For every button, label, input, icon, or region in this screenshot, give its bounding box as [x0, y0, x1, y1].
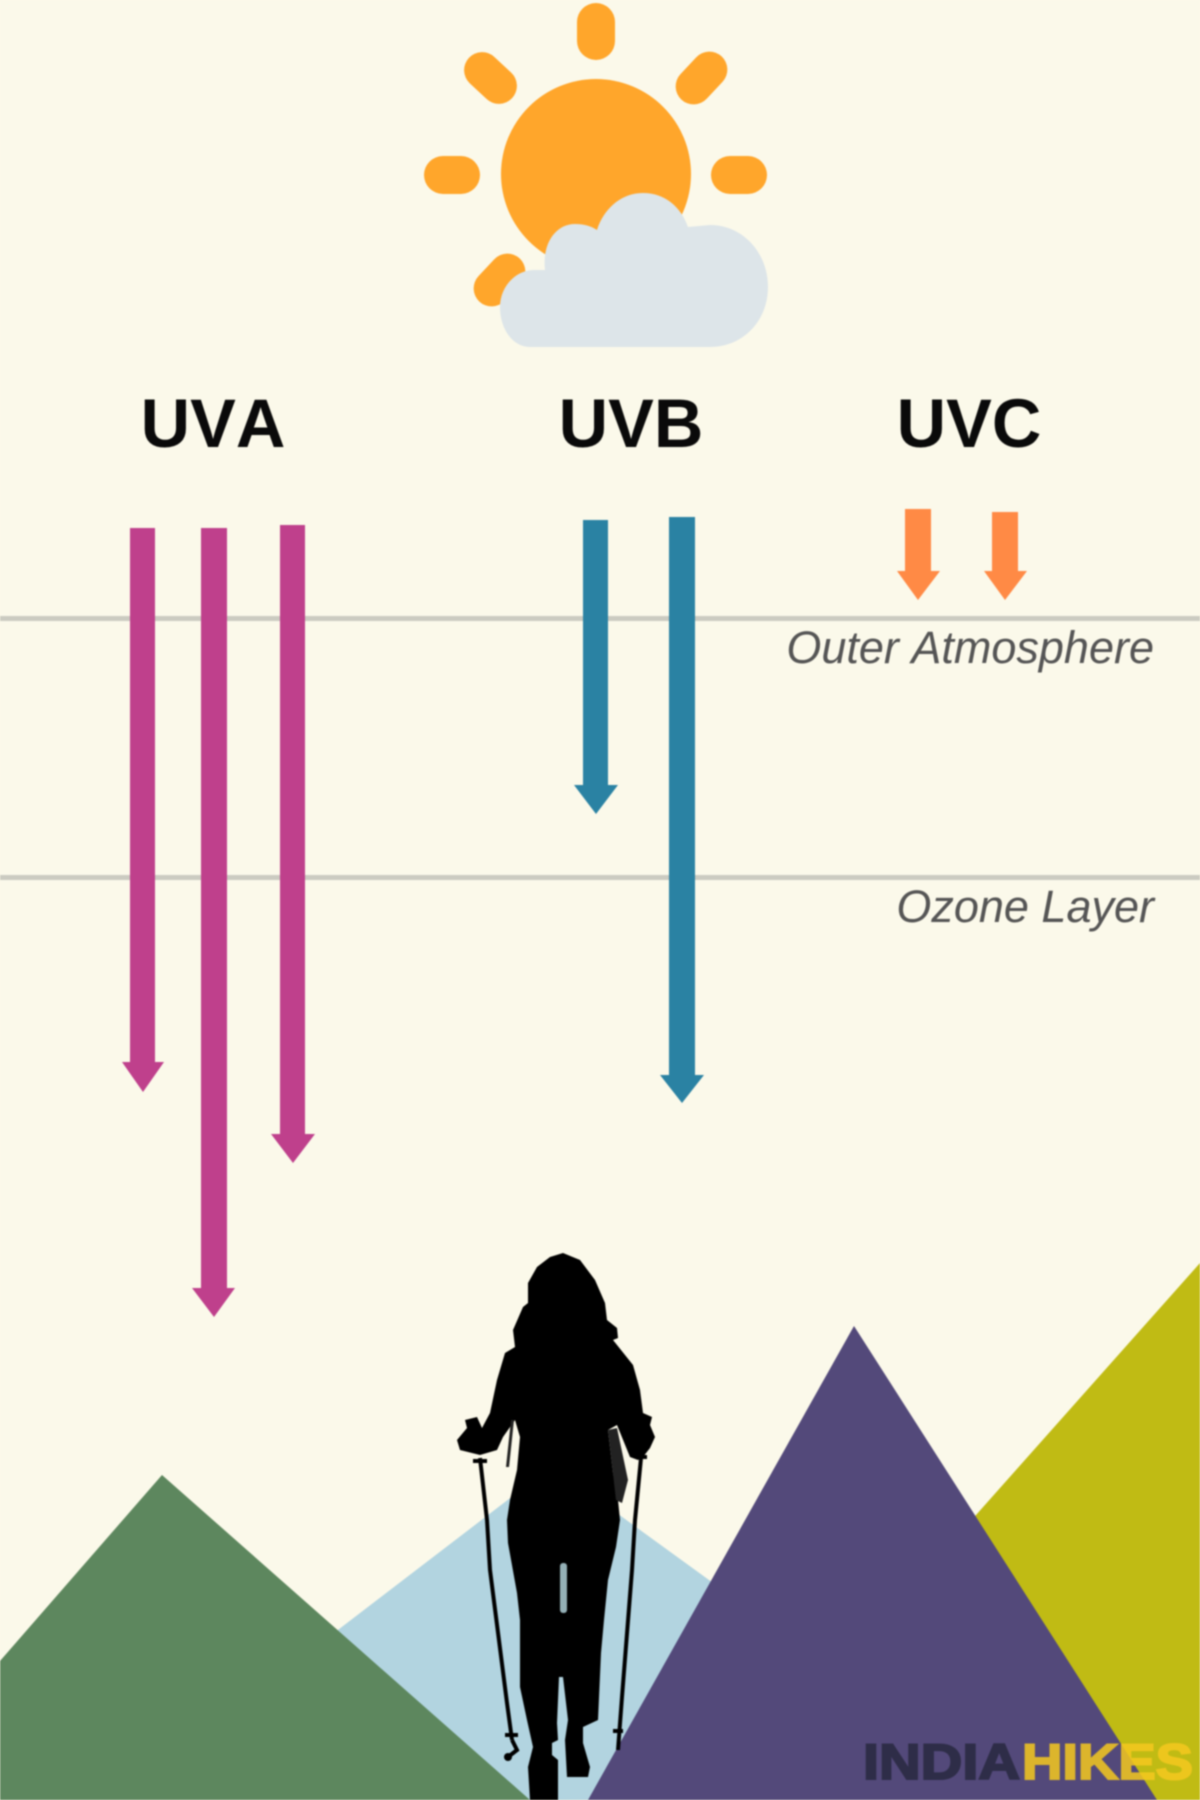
hiker body — [457, 1253, 655, 1800]
hiker silhouette with trekking poles — [457, 1253, 655, 1800]
heading: UVC: UVC — [897, 385, 1041, 462]
label: Outer Atmosphere: Outer Atmosphere — [786, 622, 1154, 673]
sun rays — [424, 3, 767, 314]
heading: UVA: UVA — [141, 385, 285, 462]
arrows: UVA — [122, 525, 315, 1317]
mountain: purple — [588, 1326, 1157, 1800]
logo word: HIKES: HIKES — [1022, 1734, 1193, 1790]
icon: sun behind cloud — [424, 3, 768, 347]
logo: INDIAHIKES — [863, 1734, 1193, 1790]
arrows: UVC — [897, 509, 1027, 600]
cloud — [500, 193, 768, 347]
atmosphere layer lines — [0, 616, 1200, 880]
gap between legs — [560, 1563, 567, 1613]
left trekking pole — [473, 1458, 518, 1761]
right trekking pole — [613, 1457, 647, 1750]
sun disc — [501, 79, 691, 269]
mountain: yellow-green — [960, 1263, 1200, 1800]
mountain: light blue — [300, 1466, 760, 1800]
mountains — [0, 1263, 1200, 1800]
arrows: UVB — [574, 517, 704, 1103]
logo word: INDIA: INDIA — [863, 1734, 1020, 1790]
mountain: green — [0, 1475, 530, 1800]
heading: UVB: UVB — [559, 385, 703, 462]
pole straps — [506, 1420, 628, 1503]
label: Ozone Layer: Ozone Layer — [896, 881, 1156, 932]
